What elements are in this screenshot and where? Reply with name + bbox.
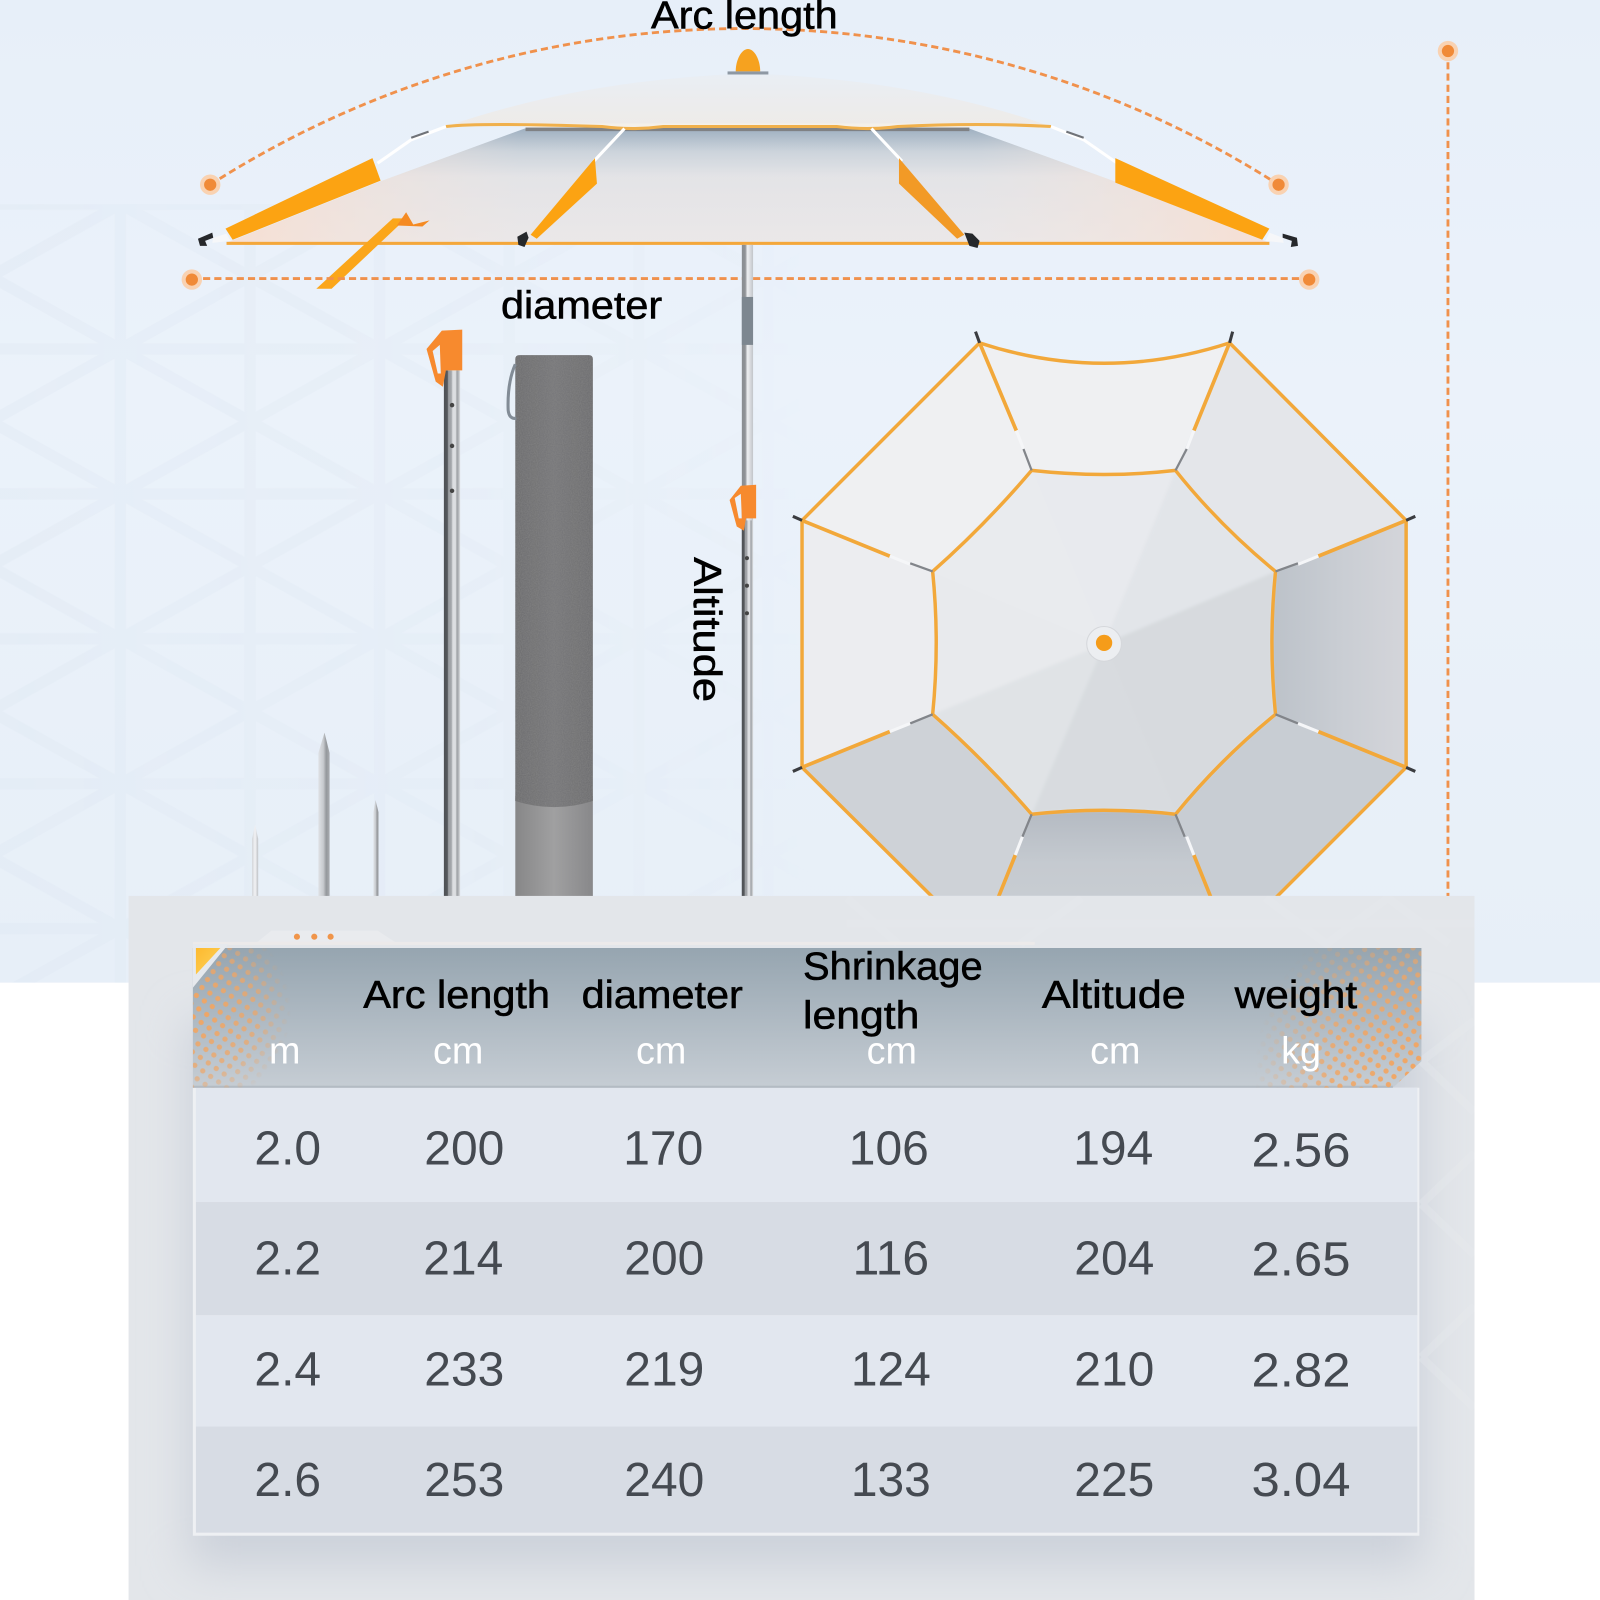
header titles: weight bbox=[1234, 974, 1357, 1017]
header units: m bbox=[269, 1029, 300, 1071]
orange edges bbox=[802, 343, 1406, 944]
umbrella side view bbox=[198, 49, 1298, 289]
header units: cm bbox=[433, 1029, 483, 1071]
bag loop bbox=[508, 364, 516, 418]
row 2.6 m bbox=[254, 1454, 1351, 1507]
header titles: diameter bbox=[582, 974, 743, 1017]
row 2.2 m: 200 bbox=[624, 1232, 704, 1285]
row 2.6 m: 3.04 bbox=[1252, 1454, 1351, 1507]
header units: cm bbox=[1090, 1029, 1140, 1071]
carry bag bbox=[508, 355, 593, 898]
row 2.4 m: 2.4 bbox=[254, 1344, 321, 1397]
tab with three dots bbox=[193, 931, 1035, 945]
spec table panel bbox=[129, 896, 1474, 1600]
row 2.2 m: 116 bbox=[853, 1232, 929, 1285]
row 2.4 m: 233 bbox=[424, 1344, 504, 1397]
ribs bbox=[378, 127, 1117, 163]
row 2.2 m: 2.2 bbox=[254, 1232, 321, 1285]
header titles: Altitude bbox=[1042, 974, 1186, 1017]
table rows bbox=[193, 1088, 1419, 1536]
row 2.0 m: 2.56 bbox=[1252, 1124, 1351, 1177]
inner crown panels bbox=[933, 470, 1276, 814]
row 2.0 m: 2.0 bbox=[254, 1122, 321, 1175]
umbrella top view bbox=[793, 332, 1415, 944]
pole clip bbox=[730, 485, 756, 531]
orange wedges bbox=[226, 158, 381, 240]
header units bbox=[269, 1029, 1321, 1071]
canopy roof bbox=[446, 73, 1051, 127]
row 2.6 m: 225 bbox=[1074, 1454, 1154, 1507]
halftone bbox=[192, 948, 286, 1088]
row 2.0 m: 200 bbox=[424, 1122, 504, 1175]
tie strap bbox=[316, 218, 406, 289]
row 2.2 m: 214 bbox=[423, 1232, 503, 1285]
orange clip bbox=[427, 330, 462, 387]
bottom edge bbox=[227, 242, 1269, 245]
row 2.0 m: 194 bbox=[1073, 1122, 1153, 1175]
dashed diameter measure bbox=[182, 269, 1319, 290]
table header bbox=[193, 944, 1421, 1088]
row 2.2 m: 204 bbox=[1074, 1232, 1154, 1285]
row 2.4 m: 2.82 bbox=[1252, 1345, 1351, 1398]
header titles: Shrinkage bbox=[803, 946, 983, 989]
vent gap strip bbox=[526, 128, 969, 131]
center pole bbox=[730, 245, 756, 898]
header titles bbox=[363, 946, 1357, 1038]
black rib tips bbox=[198, 232, 1298, 248]
canopy lower skirt bbox=[227, 129, 1269, 243]
row 2.6 m: 2.6 bbox=[254, 1454, 321, 1507]
header units: cm bbox=[636, 1029, 686, 1071]
row 2.0 m: 106 bbox=[849, 1122, 929, 1175]
dashed arc length measure bbox=[200, 29, 1289, 195]
header titles: Arc length bbox=[363, 974, 550, 1017]
row 2.6 m: 133 bbox=[851, 1454, 931, 1507]
header units: cm bbox=[867, 1029, 917, 1071]
header titles: length bbox=[803, 995, 919, 1038]
dashed altitude measure bbox=[1438, 41, 1458, 898]
row 2.4 m: 219 bbox=[624, 1344, 704, 1397]
row 2.0 m bbox=[254, 1122, 1351, 1177]
row 2.6 m: 253 bbox=[424, 1454, 504, 1507]
finial bbox=[736, 49, 760, 71]
page background bbox=[0, 0, 1600, 983]
ground spikes bbox=[252, 733, 379, 898]
second pole section bbox=[427, 330, 462, 898]
header units: kg bbox=[1281, 1029, 1321, 1071]
row 2.6 m: 240 bbox=[624, 1454, 704, 1507]
row 2.4 m: 124 bbox=[851, 1344, 931, 1397]
center finial bbox=[1087, 627, 1121, 661]
row 2.4 m: 210 bbox=[1074, 1344, 1154, 1397]
label: diameter: diameter bbox=[501, 284, 662, 327]
corner accent bbox=[193, 944, 229, 988]
white rib links bbox=[890, 431, 1318, 855]
black tips bbox=[793, 332, 1415, 771]
row 2.2 m bbox=[254, 1232, 1351, 1287]
row 2.2 m: 2.65 bbox=[1252, 1234, 1351, 1287]
grey inner ribs bbox=[910, 449, 1298, 837]
row 2.0 m: 170 bbox=[623, 1122, 703, 1175]
label: altitude: Altitude bbox=[685, 557, 728, 702]
row 2.4 m bbox=[254, 1344, 1351, 1398]
outer panels bbox=[980, 343, 1230, 474]
